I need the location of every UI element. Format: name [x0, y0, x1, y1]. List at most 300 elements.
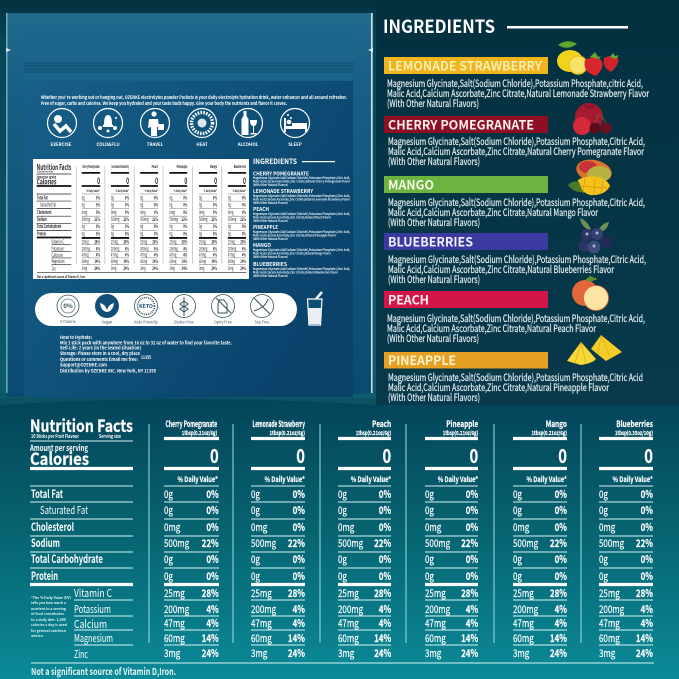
panel: pouch ingredients list: Malic Acid,Calcium Ascorbate,Zinc Citrate,Natural Mango Flavor	[253, 250, 331, 256]
panel: pouch nutrition facts label: 0g	[140, 203, 144, 209]
panel: pouch nutrition facts label: 28%	[94, 240, 100, 246]
panel: pouch nutrition facts label: 0g	[82, 232, 85, 238]
panel: mango	[384, 174, 645, 229]
icon: sleep	[280, 108, 310, 148]
panel: pouch nutrition facts label: Amount per serving	[36, 174, 56, 180]
row labels: Total Fat	[31, 486, 63, 502]
panel: peach: (With Other Natural Flavors)	[387, 330, 479, 345]
panel: pouch nutrition facts label: 24%	[152, 266, 158, 272]
panel: pouch nutrition facts label: % Daily Value*	[204, 189, 218, 193]
panel: pouch nutrition facts label: Calcium	[51, 251, 63, 259]
panel: pouch nutrition facts label: 4%	[154, 253, 158, 259]
panel: pouch ingredients list: Malic Acid,Calcium Ascorbate,Zinc Citrate,Natural Lemonade Strawberry Flavor	[253, 196, 350, 202]
panel: pineapple: PINEAPPLE	[388, 350, 456, 369]
panel: pouch ingredients list: (With Other Natural Flavors)	[253, 273, 288, 278]
column: pineapple: 4%	[466, 615, 478, 630]
text block: how to hydrate: How to Hydrate:	[60, 334, 92, 341]
column: mango: 0g	[513, 486, 523, 501]
panel: dietary badges: Gluten Free	[174, 320, 194, 326]
column: pineapple: 3mg	[425, 645, 442, 660]
column: lemonade strawberry: 500mg	[251, 535, 277, 550]
panel: pouch nutrition facts label: 0%	[213, 196, 217, 202]
panel: pouch nutrition facts label: 0%	[96, 196, 100, 202]
panel: pouch nutrition facts label: 0mg	[169, 210, 175, 216]
column: peach: 0g	[338, 568, 348, 583]
heading: nutrition facts: Serving size	[99, 433, 121, 440]
panel: pouch nutrition facts label: 0mg	[140, 210, 146, 216]
column: blueberries: 0%	[641, 551, 653, 566]
column: pineapple: 0%	[466, 486, 478, 501]
heading: ingredients: INGREDIENTS	[383, 13, 495, 39]
column: blueberries: 0%	[641, 502, 653, 517]
column: lemonade strawberry: 200mg	[251, 601, 277, 616]
column: lemonade strawberry: 47mg	[251, 615, 272, 630]
column: peach: 60mg	[338, 630, 359, 645]
column: blueberries: 1tbsp(0.35oz/10g)	[615, 429, 653, 437]
panel: pouch nutrition facts label: 500mg	[228, 217, 237, 224]
column: lemonade strawberry: 25mg	[251, 585, 272, 600]
footnote: daily value: of food contributes	[31, 612, 64, 617]
panel: pouch nutrition facts label: 0%	[183, 203, 188, 209]
panel: pouch nutrition facts label: 0%	[213, 203, 217, 209]
column: pineapple: 0g	[425, 551, 435, 566]
column: blueberries: 28%	[636, 585, 653, 600]
icon: heat	[188, 108, 216, 148]
panel: pouch ingredients list: INGREDIENTS	[253, 156, 297, 167]
column: cherry pomegranate: 4%	[206, 601, 219, 616]
panel: mango: MANGO	[388, 174, 434, 194]
panel: pouch nutrition facts label: 200mg	[140, 247, 149, 253]
column: blueberries: 0g	[599, 502, 609, 517]
panel: pouch nutrition facts label: 0%	[213, 224, 217, 231]
panel: pouch nutrition facts label: 500mg	[111, 217, 120, 224]
panel: pouch nutrition facts label: Zinc	[51, 265, 57, 273]
column: pineapple: 0	[469, 440, 478, 469]
panel: pouch nutrition facts label: 25mg	[111, 240, 119, 246]
column: mango	[513, 418, 567, 660]
column: blueberries: 4%	[641, 615, 653, 630]
panel: pouch nutrition facts label: 3mg	[140, 266, 146, 272]
column: lemonade strawberry: 24%	[288, 645, 305, 660]
panel: pouch nutrition facts label: 28%	[123, 240, 129, 246]
column: blueberries: 0%	[641, 568, 653, 583]
column: peach: 0g	[338, 486, 348, 501]
panel: pouch nutrition facts label: 10 Sticks per Fruit Flavour	[37, 169, 53, 174]
column: peach: 4%	[379, 615, 391, 630]
column: mango: 200mg	[513, 601, 539, 616]
panel: pouch nutrition facts label: 47mg	[111, 253, 119, 259]
panel: pouch nutrition facts label: Not a significant source of Vitamin D, Iron.	[37, 273, 86, 279]
panel: pouch nutrition facts label: 0g	[111, 232, 115, 238]
panel: pouch nutrition facts label: 0%	[183, 224, 188, 231]
column: peach: 200mg	[338, 601, 364, 616]
column: pineapple: 1tbsp(0.21oz/6g)	[443, 429, 478, 437]
panel: pouch nutrition facts label: 0g	[169, 224, 173, 231]
panel: pouch nutrition facts label: 14%	[123, 260, 129, 266]
panel: pouch nutrition facts label: 200mg	[228, 247, 237, 253]
panel: dietary badges: 0%	[63, 301, 73, 310]
icon: blueberries	[578, 218, 612, 254]
panel: pouch nutrition facts label: 0%	[242, 224, 246, 231]
heading: nutrition facts: Nutrition Facts	[30, 412, 133, 437]
column: cherry pomegranate: 47mg	[164, 615, 185, 630]
panel: pouch nutrition facts label: 25mg	[82, 240, 89, 246]
column: mango: 24%	[550, 645, 567, 660]
panel: pouch nutrition facts label: 0%	[154, 203, 158, 209]
column: lemonade strawberry: 0%	[293, 568, 305, 583]
column: cherry pomegranate	[164, 418, 219, 660]
column: cherry pomegranate: 0%	[206, 486, 219, 501]
panel: pouch nutrition facts label: 0g	[228, 196, 231, 202]
panel: pouch nutrition facts label: 0g	[199, 232, 203, 238]
icon: glass with stick pack	[308, 292, 322, 325]
panel: pouch ingredients list: CHERRY POMEGRANATE	[253, 170, 309, 178]
column: cherry pomegranate: 24%	[202, 645, 219, 660]
column: cherry pomegranate: 25mg	[164, 585, 185, 600]
column: blueberries: Blueberries	[616, 418, 653, 430]
panel: pouch nutrition facts label: Lemonade Strawberry	[111, 163, 129, 169]
panel: pouch nutrition facts label: 47mg	[140, 253, 148, 259]
column: blueberries: 0g	[599, 486, 609, 501]
column: mango: 3mg	[513, 645, 530, 660]
column: peach: 0%	[379, 502, 391, 517]
panel: pouch ingredients list: Malic Acid,Calcium Ascorbate,Zinc Citrate,Natural Cherry Pomegranate Flavor	[253, 178, 350, 184]
panel: pouch nutrition facts label: 4%	[96, 247, 100, 253]
column: blueberries: 25mg	[599, 585, 620, 600]
column: lemonade strawberry: % Daily Value*	[265, 473, 305, 484]
text block: how to hydrate: Distribution by OZENKE INC. New York, NY 11355	[60, 368, 156, 374]
panel: pouch nutrition facts label: 28%	[182, 240, 188, 246]
column: blueberries: 60mg	[599, 630, 620, 645]
column: mango: 0g	[513, 551, 523, 566]
column: peach: 0g	[338, 551, 348, 566]
panel: pouch nutrition facts label: 0%	[154, 210, 158, 216]
panel: pouch ingredients list: (With Other Natural Flavors)	[253, 218, 288, 223]
panel: pouch nutrition facts label: 500mg	[169, 217, 178, 224]
panel: pouch nutrition facts label: 500mg	[140, 217, 149, 224]
column: blueberries: 22%	[636, 535, 653, 550]
panel: pouch nutrition facts label: 0mg	[82, 210, 88, 216]
panel: pouch nutrition facts label: Peach	[152, 163, 158, 169]
panel: pouch nutrition facts label: 14%	[94, 260, 100, 266]
column: cherry pomegranate: 3mg	[164, 645, 181, 660]
column: peach: 24%	[374, 645, 391, 660]
column: mango: 22%	[550, 535, 567, 550]
column: cherry pomegranate: % Daily Value*	[178, 473, 218, 484]
panel: pouch nutrition facts label: 0g	[199, 224, 203, 231]
panel: pouch nutrition facts label: Protein	[37, 230, 46, 238]
panel: pouch nutrition facts label: Saturated Fat	[40, 201, 56, 209]
column: peach: 47mg	[338, 615, 359, 630]
panel: pouch nutrition facts label: 28%	[152, 240, 158, 246]
column: cherry pomegranate: 1tbsp(0.21oz/6g)	[182, 429, 217, 437]
column: cherry pomegranate: 500mg	[164, 535, 190, 550]
panel: pouch nutrition facts label: 60mg	[169, 260, 177, 266]
column: cherry pomegranate: 0g	[164, 502, 174, 517]
panel: pouch ingredients list: Magnesium Glycinate,Salt(Sodium Chloride),Potassium Phosphate,Citric Acid,	[253, 229, 350, 234]
heading: nutrition facts: Calories	[30, 445, 89, 470]
panel: pouch ingredients list: BLUEBERRIES	[253, 260, 288, 268]
panel: pouch nutrition facts label: 200mg	[199, 247, 208, 253]
column: pineapple: 0mg	[425, 519, 442, 534]
panel: pouch nutrition facts label: 24%	[123, 266, 129, 272]
text block: pouch intro: Free of sugar, carbs and calories. We keep you hydrated and your taste buds happy. Give your body the nutrients and flavor it craves.	[41, 100, 287, 107]
column: pineapple: 0g	[425, 502, 435, 517]
column: peach: 0g	[338, 502, 348, 517]
panel: dietary badges: Keto Friendly	[134, 320, 158, 326]
icon: travel	[140, 108, 170, 148]
text block: how to hydrate: Storage: Please store in a cool, dry place	[60, 350, 140, 357]
panel: pouch nutrition facts label: 25mg	[199, 240, 207, 246]
panel: pouch ingredients list: (With Other Natural Flavors)	[253, 182, 288, 187]
text block: how to hydrate: Questions or comments Email me free:	[60, 356, 138, 363]
panel: pouch nutrition facts label: 47mg	[228, 253, 235, 259]
panel: pouch nutrition facts label: 0%	[96, 210, 100, 216]
row labels: Protein	[31, 568, 58, 584]
panel: pouch nutrition facts label: 24%	[211, 266, 217, 272]
column: lemonade strawberry: 0g	[251, 502, 261, 517]
panel: pouch nutrition facts label: 25mg	[169, 240, 177, 246]
icon: exercise	[48, 108, 76, 148]
panel: pouch nutrition facts label: 22%	[240, 217, 246, 224]
panel: pouch nutrition facts label: 0%	[125, 203, 129, 209]
column: blueberries: 3mg	[599, 645, 616, 660]
panel: pouch nutrition facts label: 47mg	[169, 253, 177, 259]
column: blueberries: 4%	[641, 601, 653, 616]
panel: pouch nutrition facts label: 0g	[228, 224, 231, 231]
row labels: Calcium	[74, 616, 107, 632]
panel: pouch nutrition facts label: 14%	[240, 260, 246, 266]
column: peach: 0%	[379, 568, 391, 583]
panel: pouch nutrition facts label: 4%	[183, 247, 188, 253]
panel: pouch nutrition facts label: 14%	[152, 260, 158, 266]
panel: pouch ingredients list: Magnesium Glycinate,Salt(Sodium Chloride),Potassium Phosphate,Citric Acid,	[253, 175, 350, 180]
panel: pouch nutrition facts label: 0g	[199, 196, 203, 202]
icon: mango	[568, 156, 614, 195]
panel: dietary badges: 0 Calorie	[60, 319, 76, 325]
panel: pouch nutrition facts label: 24%	[94, 266, 100, 272]
column: blueberries: 0%	[641, 486, 653, 501]
column: cherry pomegranate: 0%	[206, 568, 219, 583]
panel: pouch nutrition facts label: 25mg	[140, 240, 148, 246]
column: lemonade strawberry: Lemonade Strawberry	[253, 418, 305, 430]
column: pineapple: Pineapple	[446, 418, 479, 430]
panel: pouch nutrition facts label: 60mg	[228, 260, 235, 266]
panel: pouch nutrition facts label: 4%	[242, 247, 246, 253]
panel: pouch nutrition facts label: Blueberries	[234, 163, 246, 169]
column: lemonade strawberry: 3mg	[251, 645, 268, 660]
column: mango: 47mg	[513, 615, 534, 630]
column: lemonade strawberry: 60mg	[251, 630, 272, 645]
column: pineapple: 0%	[466, 551, 478, 566]
icon: peach	[572, 276, 608, 310]
icon: pineapple slices	[567, 335, 622, 365]
column: peach: 0	[382, 440, 391, 469]
column: mango: 28%	[550, 585, 567, 600]
panel: cherry pomegranate	[384, 114, 645, 168]
panel: pouch nutrition facts label: 24%	[240, 266, 246, 272]
column: cherry pomegranate: 14%	[202, 630, 219, 645]
panel: mango: (With Other Natural Flavors)	[388, 214, 480, 229]
column: peach: 0%	[379, 486, 391, 501]
panel: pouch ingredients list: LEMONADE STRAWBERRY	[253, 187, 314, 195]
panel: pouch nutrition facts label: 200mg	[111, 247, 120, 253]
panel: dietary badges: Vegan	[102, 320, 112, 326]
panel: pouch nutrition facts label: Calories	[37, 176, 57, 187]
column: mango: 0g	[513, 502, 523, 517]
panel: pouch ingredients list: Malic Acid,Calcium Ascorbate,Zinc Citrate,Natural Blueberries Flavor	[253, 270, 338, 274]
icon: sleep: SLEEP	[288, 142, 302, 148]
column: cherry pomegranate: 0%	[206, 502, 219, 517]
panel: pouch nutrition facts label: 0%	[183, 232, 188, 238]
panel: pouch nutrition facts label: Total Carbohydrate	[37, 224, 61, 230]
panel: pouch nutrition facts label: 0%	[96, 224, 100, 231]
panel: pouch nutrition facts label: 0%	[154, 224, 158, 231]
panel: mango: Malic Acid,Calcium Ascorbate,Zinc Citrate,Natural Mango Flavor	[388, 204, 598, 219]
icon: alcohol	[234, 108, 262, 148]
panel: pouch nutrition facts label: 3mg	[169, 266, 175, 272]
panel: pouch nutrition facts label: 0g	[111, 224, 115, 231]
panel: pouch nutrition facts label: 22%	[211, 217, 217, 224]
panel: pouch nutrition facts label: Potassium	[51, 245, 64, 253]
column: mango: 0%	[555, 568, 567, 583]
column: cherry pomegranate: 200mg	[164, 601, 190, 616]
row labels: Potassium	[74, 601, 111, 617]
panel: pouch nutrition facts label: 0%	[125, 210, 129, 216]
panel: pouch nutrition facts label: 0%	[242, 203, 246, 209]
column: lemonade strawberry: 0g	[251, 551, 261, 566]
panel: pouch nutrition facts label: 0	[214, 175, 217, 187]
column: pineapple: % Daily Value*	[438, 473, 479, 484]
panel: pouch nutrition facts label: 0%	[242, 232, 246, 238]
column: blueberries: 0mg	[599, 519, 616, 534]
column: pineapple: 4%	[466, 601, 478, 616]
panel: pouch nutrition facts label: 4%	[125, 253, 129, 259]
panel: pouch nutrition facts label: 0%	[96, 203, 100, 209]
column: peach: 14%	[374, 630, 391, 645]
panel: large nutrition facts table	[0, 399, 679, 679]
panel: cherry pomegranate: (With Other Natural Flavors)	[388, 153, 480, 168]
panel: pouch nutrition facts label: 0g	[82, 224, 85, 231]
column: cherry pomegranate: 0	[210, 440, 219, 469]
icon: cold and flu	[94, 108, 122, 148]
column: pineapple: 25mg	[425, 585, 446, 600]
column: lemonade strawberry: 14%	[288, 630, 305, 645]
panel: pouch nutrition facts label: 0%	[183, 210, 188, 216]
panel: pouch nutrition facts label: 3mg	[199, 266, 205, 272]
panel: pouch nutrition facts label: 0%	[242, 196, 246, 202]
panel: pouch ingredients list: (With Other Natural Flavors)	[253, 254, 288, 259]
row labels	[31, 486, 113, 662]
panel: product pouch back	[6, 13, 373, 398]
panel: lemonade strawberry	[384, 56, 649, 110]
panel: pouch nutrition facts label: 200mg	[169, 247, 178, 253]
text block: how to hydrate: Self-Life: 2 years (in the sealed situation)	[60, 344, 141, 352]
panel: pouch nutrition facts label: % Daily Value*	[116, 189, 130, 193]
panel: pouch nutrition facts label: 4%	[183, 253, 188, 259]
text block: pouch intro: Whether you' re working out or hanging out, OZENKE electrolytes powder Pockets is your daily electrolyte hydration drink, water enhancer and all around refresher.	[41, 94, 347, 101]
panel: pouch nutrition facts label: Cholesterol	[37, 209, 52, 216]
column: lemonade strawberry	[251, 418, 305, 660]
panel: pouch nutrition facts label: 22%	[123, 217, 129, 224]
panel: pouch nutrition facts label: 60mg	[140, 260, 148, 266]
panel: pouch nutrition facts label: 24%	[182, 266, 188, 272]
column: mango: 0g	[513, 568, 523, 583]
panel: blueberries: (With Other Natural Flavors)	[388, 271, 480, 286]
panel: pouch nutrition facts label	[33, 159, 249, 279]
panel: pouch nutrition facts label: 0	[97, 175, 100, 187]
icon: lemon and strawberries	[557, 41, 619, 76]
panel: pouch nutrition facts label: 0g	[140, 232, 144, 238]
column: pineapple	[425, 418, 479, 660]
panel: pouch nutrition facts label: 0g	[169, 196, 173, 202]
panel: pouch nutrition facts label: 4%	[242, 253, 246, 259]
panel: pouch nutrition facts label: 0%	[125, 224, 129, 231]
footnote: daily value: calories a day is used	[31, 623, 67, 628]
column: peach: 0%	[379, 551, 391, 566]
panel: pouch nutrition facts label: 28%	[211, 240, 217, 246]
column: mango: 500mg	[513, 535, 539, 550]
column: mango: 0mg	[513, 519, 530, 534]
column: pineapple: 0%	[466, 568, 478, 583]
panel: pouch nutrition facts label: 0	[243, 175, 246, 187]
panel: pouch ingredients list	[253, 156, 350, 278]
column: pineapple: 22%	[461, 535, 478, 550]
panel: pouch ingredients list: Malic Acid,Calcium Ascorbate,Zinc Citrate,Natural Pineapple Flavor	[253, 232, 336, 238]
panel: pouch nutrition facts label: 500mg	[82, 217, 91, 224]
row labels: Cholesterol	[31, 519, 74, 535]
column: cherry pomegranate: 0g	[164, 568, 174, 583]
panel: pouch ingredients list: PINEAPPLE	[253, 223, 278, 231]
panel: pouch nutrition facts label: % Daily Value*	[174, 189, 188, 193]
column: pineapple: 28%	[461, 585, 478, 600]
column: mango: 0%	[555, 502, 567, 517]
column: pineapple: 14%	[461, 630, 478, 645]
panel: pouch nutrition facts label: 0%	[213, 210, 217, 216]
panel: pouch nutrition facts label: % Daily Value*	[145, 189, 158, 193]
column: pineapple: 500mg	[425, 535, 451, 550]
icon: alcohol: ALCOHOL	[237, 142, 259, 148]
panel: pouch nutrition facts label: 0	[155, 175, 158, 187]
column: pineapple: 0%	[466, 502, 478, 517]
column: lemonade strawberry: 0mg	[251, 519, 268, 534]
heading: nutrition facts: Amount per serving	[29, 442, 88, 454]
panel: pouch nutrition facts label: 60mg	[82, 260, 89, 266]
column: cherry pomegranate: 0g	[164, 551, 174, 566]
panel: pouch nutrition facts label: 0%	[125, 232, 129, 238]
panel: lemonade strawberry: (With Other Natural Flavors)	[387, 95, 479, 110]
panel: pouch nutrition facts label: 500mg	[199, 217, 208, 224]
panel: pouch nutrition facts label: 60mg	[199, 260, 207, 266]
column: cherry pomegranate: 60mg	[164, 630, 185, 645]
footnote: daily value: for general nutrition	[31, 629, 66, 634]
text block: how to hydrate: 11355	[141, 355, 151, 361]
column: mango: 0	[558, 440, 567, 469]
footnote: not a significant source: Not a significant source of Vitamin D,Iron.	[31, 664, 176, 678]
column: peach: % Daily Value*	[351, 473, 392, 484]
column: lemonade strawberry: 22%	[288, 535, 305, 550]
panel: pouch ingredients list: MANGO	[253, 241, 271, 249]
panel: pouch ingredients list: (With Other Natural Flavors)	[253, 236, 288, 241]
panel: pouch nutrition facts label: 0g	[82, 203, 85, 209]
panel: pouch ingredients list: Magnesium Glycinate,Salt(Sodium Chloride),Potassium Phosphate,Citric Acid,	[253, 266, 350, 271]
column: cherry pomegranate: 0%	[206, 519, 219, 534]
panel: pouch nutrition facts label: 0%	[242, 210, 246, 216]
column: peach: 0mg	[338, 519, 355, 534]
panel: blueberries: BLUEBERRIES	[388, 232, 473, 250]
panel: pineapple	[384, 350, 643, 404]
panel: pouch nutrition facts label: 0g	[111, 196, 115, 202]
